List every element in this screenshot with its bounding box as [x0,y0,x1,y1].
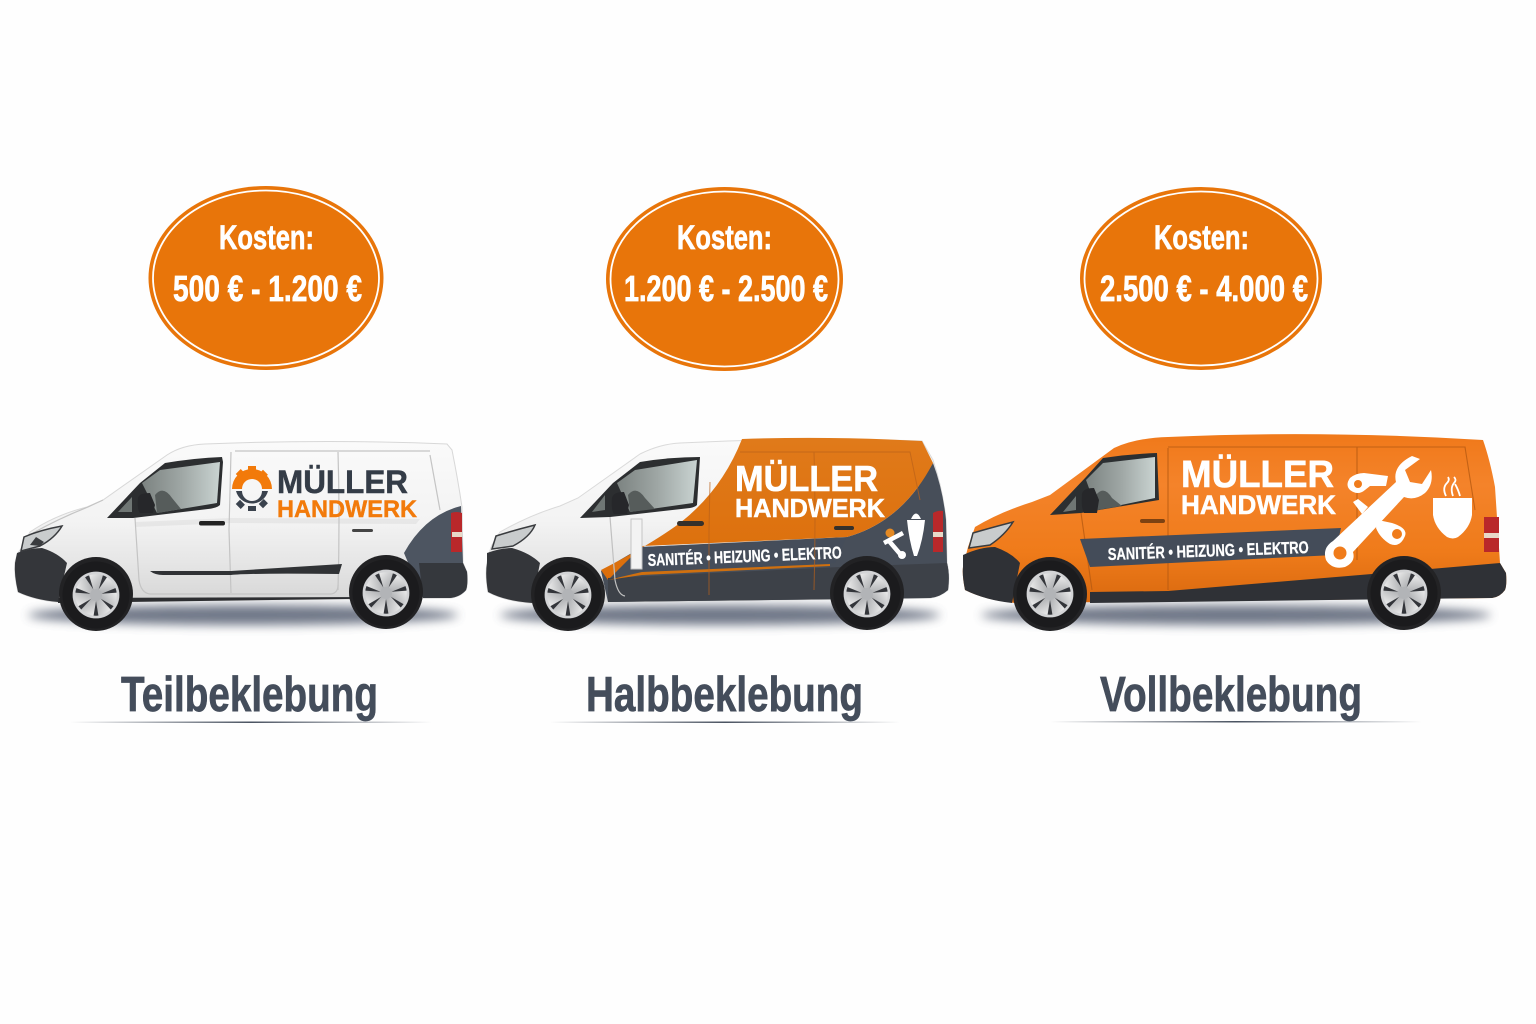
tail light [451,512,462,552]
mirror [138,493,155,513]
logo text: MÜLLER [1181,453,1334,496]
tail light [933,511,943,552]
van: Halbbeklebung [486,438,949,631]
headlight [492,525,535,549]
tail light [1484,517,1499,552]
van body [963,434,1506,603]
service text: SANITÉR • HEIZUNG • ELEKTRO [647,543,842,570]
wheels [534,562,602,628]
ground shadow [981,605,1491,625]
price badge: Halbbeklebung [606,187,843,371]
van: Teilbeklebung [15,442,467,631]
icon: steaming cup [1433,477,1472,538]
band [642,538,846,572]
price badge: Vollbeklebung [1080,187,1322,370]
logo gear [232,466,272,511]
window glass [617,460,697,512]
van body [15,442,467,602]
price badge: Vollbeklebung: 2.500 € - 4.000 € [1100,268,1308,309]
price badge: Vollbeklebung: Kosten: [1154,219,1249,257]
door lines [709,452,920,595]
logo text: MÜLLER [277,464,408,500]
headlight [969,522,1013,548]
icon: tools [884,528,906,559]
window frame [1050,453,1159,515]
window frame [580,457,700,518]
side rub strip [150,564,342,575]
price badge: Halbbeklebung: 1.200 € - 2.500 € [624,268,828,309]
wheel arches [1013,557,1087,631]
panel reflection [135,518,420,527]
door handles [199,521,225,526]
front bumper [963,547,1020,603]
grey rear sweep [404,506,467,598]
seat [628,491,655,512]
wheels [62,562,130,628]
mirror [612,492,629,514]
seat [1096,491,1122,510]
orange wrap [601,438,933,580]
ground shadow [500,605,940,625]
icon: crossed wrenches [1325,456,1432,568]
icon: plumb bob [907,514,925,556]
window glass [1086,457,1155,510]
dark sill [608,563,949,602]
sill [58,597,420,603]
door outline [610,517,625,596]
van: Halbbeklebung: HANDWERK [735,493,885,523]
front bumper [15,548,67,602]
service text: SANITÉR • HEIZUNG • ELEKTRO [1107,538,1309,564]
price badge: Teilbeklebung: 500 € - 1.200 € [173,268,362,309]
band [1080,528,1341,567]
window frame [107,457,223,518]
dark lower body [601,463,949,602]
seat [155,491,181,513]
price badge: Teilbeklebung [148,186,384,370]
price badge: Teilbeklebung: Kosten: [219,219,314,257]
orange pinstripe [608,564,830,580]
wheel arches [531,557,605,631]
mirror [1082,488,1099,513]
door lines [1081,447,1475,590]
label: Halbbeklebung: Halbbeklebung [586,668,863,722]
van: Vollbeklebung: HANDWERK [1181,490,1336,520]
front bumper [486,548,540,603]
door lines [33,451,440,594]
van body [486,439,949,603]
dark sill [1090,563,1506,603]
van: Teilbeklebung: HANDWERK [277,496,418,523]
wheel arches [59,557,133,631]
logo text: MÜLLER [735,458,878,499]
door handle [1140,519,1165,523]
window glass [142,462,220,513]
wheels [1016,560,1084,628]
van: Vollbeklebung [963,434,1506,631]
headlight [21,526,62,551]
door handles [677,521,704,526]
label: Teilbeklebung: Teilbeklebung [121,668,378,722]
price badge: Halbbeklebung: Kosten: [677,219,772,257]
ground shadow [28,605,458,625]
label: Vollbeklebung: Vollbeklebung [1100,668,1362,722]
